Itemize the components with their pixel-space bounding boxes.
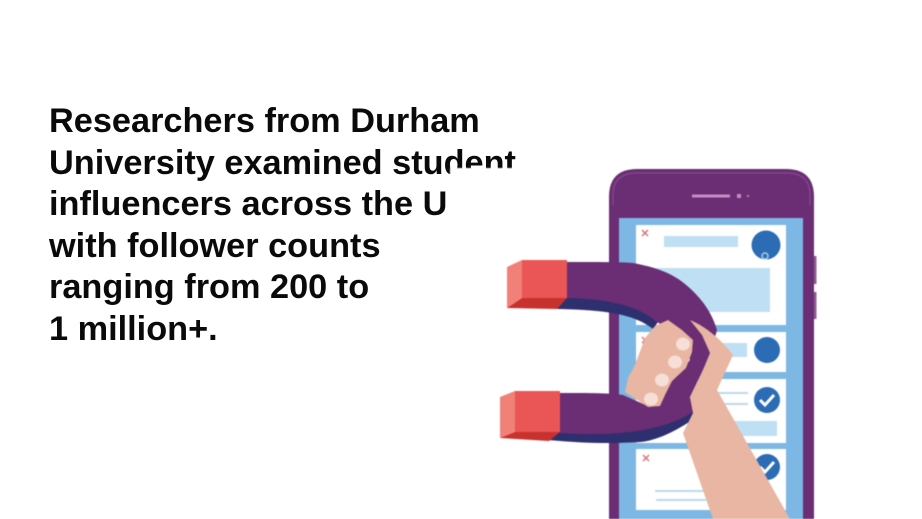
- text block: research description: University examined student: [49, 144, 516, 182]
- text block: research description: with follower counts: [49, 226, 381, 264]
- icon: smartphone: [609, 169, 816, 519]
- icon: hand gripping magnet: [625, 320, 790, 519]
- text block: research description: ranging from 200 to: [49, 268, 369, 306]
- text block: research description: [48, 102, 516, 348]
- icon: horseshoe magnet: [500, 260, 717, 443]
- text block: research description: 1 million+.: [49, 310, 218, 348]
- text block: research description: influencers across the U: [49, 185, 447, 223]
- text block: research description: Researchers from Durham: [49, 102, 480, 140]
